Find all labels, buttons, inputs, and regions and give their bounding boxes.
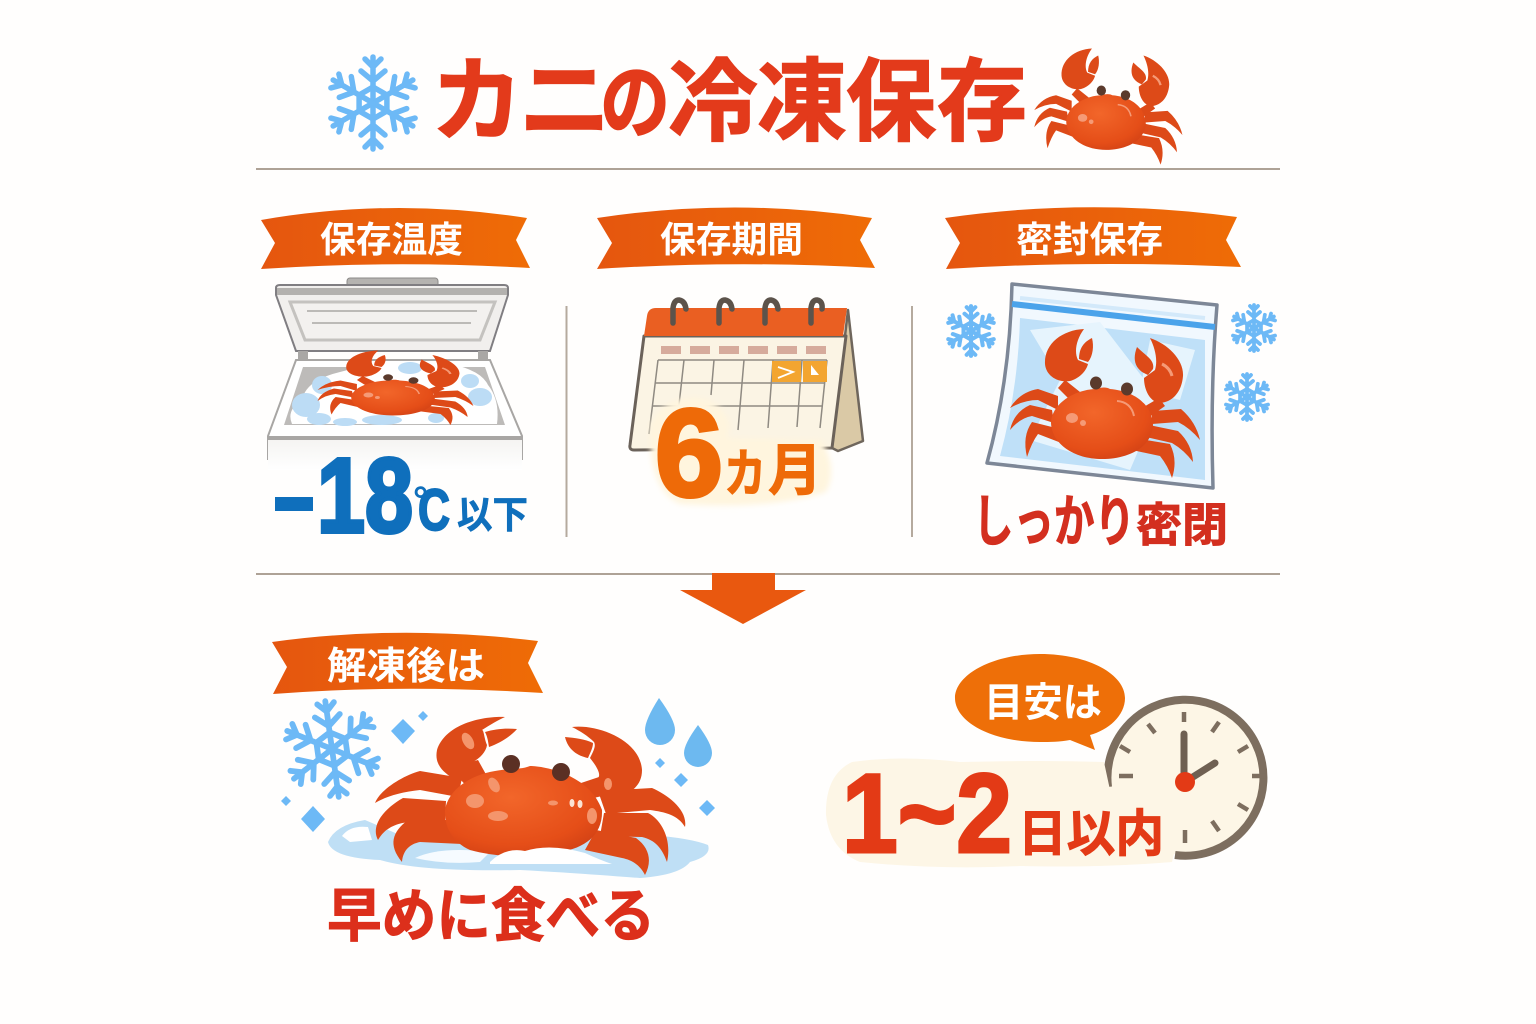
ribbon: storage period: 保存期間	[660, 211, 803, 263]
guideline value: 1~2	[842, 751, 1012, 876]
ribbon: after thawing: 解凍後は	[327, 635, 485, 690]
period value: 6	[655, 385, 723, 523]
ribbon: airtight storage	[945, 207, 1241, 269]
ribbon: after thawing	[272, 633, 543, 694]
temperature value	[275, 437, 528, 555]
period value: 月	[768, 426, 822, 507]
icon: desk calendar	[630, 300, 863, 451]
icon: snowflake lower right	[1224, 374, 1270, 420]
panel: storage period	[597, 208, 875, 523]
icon: clock	[1107, 699, 1265, 856]
ribbon: storage temperature	[261, 208, 530, 269]
temperature value: 以下	[457, 484, 528, 539]
airtight caption: しっかり	[973, 477, 1135, 558]
ribbon: airtight storage: 密封保存	[1016, 211, 1163, 263]
crab in freezer	[318, 350, 473, 425]
icon: thawed crab	[375, 717, 685, 875]
ribbon: storage period	[597, 208, 875, 269]
foam over crab	[490, 847, 612, 864]
icon: title crab	[1034, 48, 1182, 165]
icon: snowflake left	[946, 306, 996, 356]
icon: large snowflake	[278, 694, 386, 804]
ribbon: storage temperature: 保存温度	[320, 211, 463, 263]
icon: freezer bag with crab	[987, 284, 1217, 488]
icon: snowflake upper right	[1231, 305, 1277, 351]
period value	[650, 385, 831, 523]
guideline value	[826, 751, 1176, 876]
icons: sparkles	[281, 711, 715, 832]
title: カニ	[431, 27, 611, 160]
icon: water drop small	[684, 725, 712, 767]
temperature value: °	[413, 480, 428, 522]
speech bubble: 目安は	[984, 670, 1102, 728]
period value: カ	[724, 432, 766, 507]
melt puddle	[328, 820, 709, 878]
temperature value: 18	[317, 437, 413, 555]
title: の	[600, 36, 670, 155]
panel: airtight storage	[945, 207, 1277, 558]
thawing caption: 早めに食べる	[327, 869, 655, 953]
temperature value: C	[418, 478, 450, 543]
speech bubble	[955, 654, 1125, 750]
arrow: down	[680, 573, 806, 624]
airtight caption: 密閉	[1136, 489, 1228, 555]
icon: title snowflake	[327, 57, 419, 149]
panel: guideline	[826, 654, 1265, 876]
title	[431, 27, 1027, 160]
guideline value: 日以内	[1018, 794, 1164, 866]
title: 冷凍保存	[668, 29, 1027, 159]
icon: water drop large	[645, 698, 675, 745]
panel: after thawing	[272, 633, 715, 953]
panel: storage temperature	[261, 208, 530, 555]
icon: chest freezer with crab	[268, 278, 522, 470]
title block	[327, 27, 1182, 165]
